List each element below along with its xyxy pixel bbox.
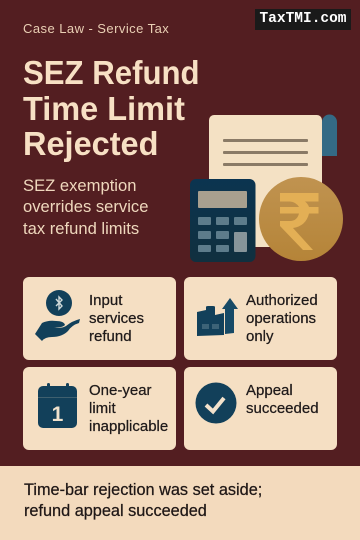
icon: hand holding coin [35, 290, 80, 341]
label [246, 382, 319, 417]
watermark: TaxTMI.com [255, 9, 351, 30]
title: Time Limit [23, 90, 185, 128]
label: One-year [89, 382, 152, 399]
label: refund [89, 328, 132, 345]
illustration: document, calculator and rupee coin [190, 114, 343, 262]
icon: document scroll [209, 115, 337, 247]
subtitle: overrides service [23, 197, 148, 216]
eyebrow: category label: Case Law - Service Tax [23, 21, 169, 36]
label [246, 292, 318, 345]
label: services [89, 310, 144, 327]
icon: calendar: 1 [52, 403, 64, 426]
label: Appeal [246, 382, 293, 399]
label: limit [89, 400, 116, 417]
subtitle [23, 176, 148, 238]
panel: authorized operations only [184, 277, 337, 360]
icon: factory with up arrow [197, 298, 238, 336]
label: inapplicable [89, 418, 168, 435]
title: SEZ Refund [23, 55, 200, 92]
footer text [24, 481, 262, 520]
watermark: TaxTMI.com: TaxTMI.com [259, 11, 346, 27]
footer text: Time-bar rejection was set aside; [24, 481, 262, 499]
title [23, 55, 200, 163]
label: only [246, 328, 274, 345]
icon: check mark badge [196, 382, 236, 424]
icon: rupee coin [259, 177, 343, 261]
label [89, 292, 144, 345]
label: Input [89, 292, 122, 309]
icon: calculator [190, 179, 256, 262]
label: operations [246, 310, 316, 327]
panel: appeal succeeded [184, 367, 337, 450]
panel: one-year limit inapplicable [23, 367, 176, 450]
icon: calendar [38, 383, 77, 428]
panel: input services refund [23, 277, 176, 360]
label: Authorized [246, 292, 318, 309]
label [89, 382, 168, 435]
subtitle: SEZ exemption [23, 176, 136, 195]
subtitle: tax refund limits [23, 219, 139, 238]
title: Rejected [23, 126, 158, 163]
footer band [0, 466, 360, 540]
footer text: refund appeal succeeded [24, 502, 207, 520]
label: succeeded [246, 400, 319, 417]
